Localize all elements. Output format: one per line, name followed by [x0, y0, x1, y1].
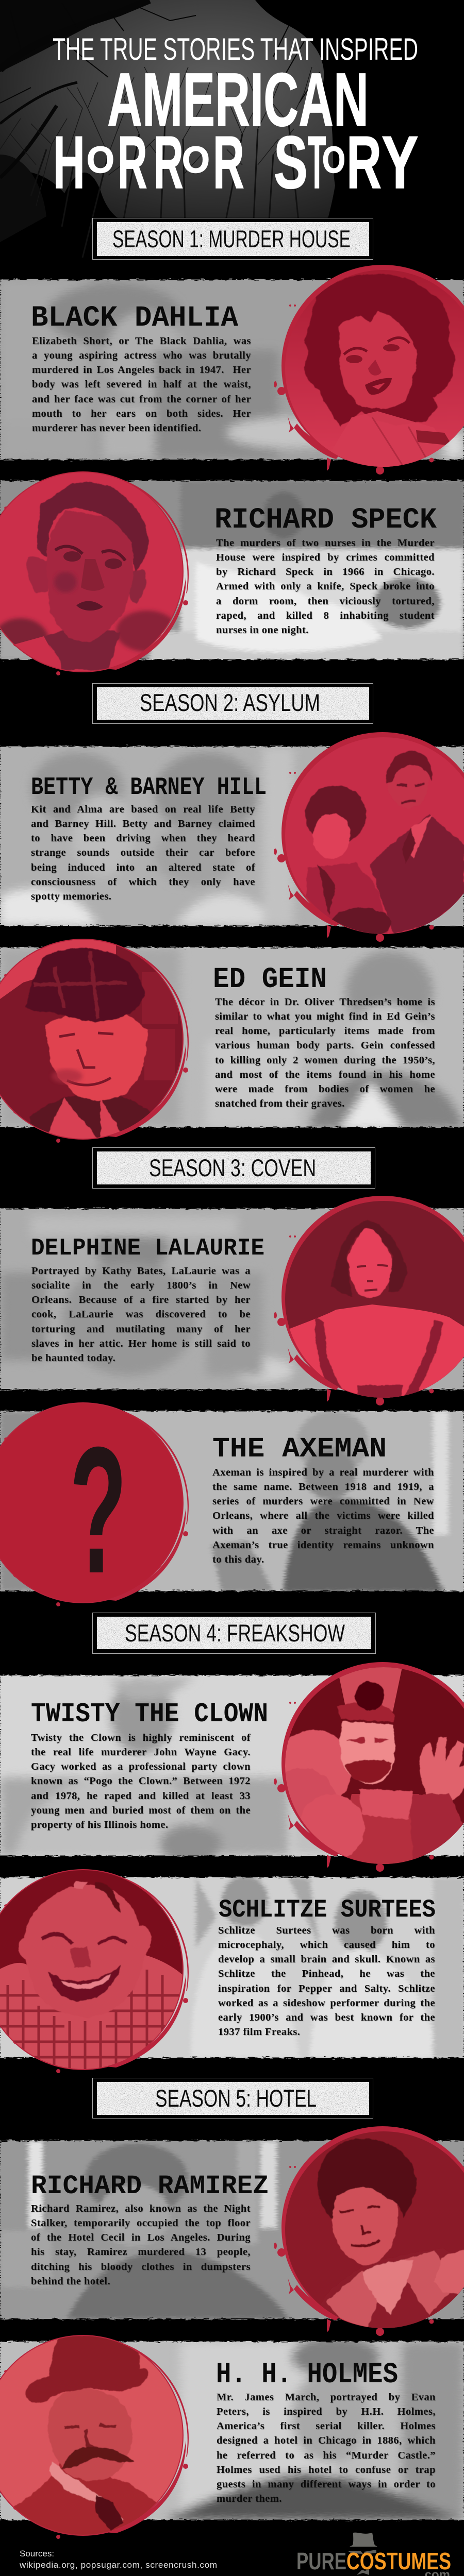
body text: being induced into an altered state of	[31, 862, 255, 873]
heading: RICHARD SPECK	[214, 504, 437, 537]
panel: Richard Ramirez	[0, 2141, 464, 2319]
body text: Axeman’s true identity remains unknown	[212, 1539, 434, 1551]
body text	[216, 537, 435, 636]
body text: snatched from their graves.	[215, 1098, 345, 1109]
title: American Horror Story: R	[118, 121, 147, 204]
panel: Delphine LaLaurie	[0, 1196, 464, 1405]
panel: H. H. Holmes	[0, 2342, 464, 2520]
body text: his stay, Ramirez murdered 13 people,	[31, 2246, 251, 2258]
heading: ED GEIN	[213, 963, 327, 996]
title: American Horror Story: O	[322, 140, 345, 181]
panel: The Axeman	[0, 1402, 464, 1611]
body text: slaves in her attic. Her home is still said to	[31, 1338, 251, 1349]
title: American Horror Story: R	[213, 121, 244, 204]
heading: DELPHINE LALAURIE	[31, 1235, 264, 1262]
body text: young men and buried most of them on the	[31, 1805, 251, 1816]
title: American Horror Story: T	[308, 121, 326, 204]
body text: 1937 film Freaks.	[218, 2026, 300, 2038]
body text: he referred to as his “Murder Castle.”	[217, 2450, 436, 2461]
body text: cook, LaLaurie was discovered to be	[31, 1309, 251, 1320]
portrait: Black Dahlia	[274, 263, 464, 474]
portrait: Richard Ramirez	[274, 2124, 464, 2336]
portrait: Richard Speck	[0, 469, 189, 675]
season banner 2: SEASON 2: ASYLUM	[140, 689, 320, 716]
heading: THE AXEMAN	[212, 1433, 387, 1465]
header: forest background and title	[0, 0, 335, 258]
body text: Armed with only a knife, Speck broke into	[216, 581, 435, 592]
body text: behind the hotel.	[31, 2276, 110, 2287]
logo: PureCostumes.com	[289, 2524, 464, 2576]
season banner 3	[92, 1147, 375, 1189]
body text: to have been driving when they heard	[31, 833, 255, 844]
body text: inspiration for Pepper and Salty. Schlitze	[218, 1983, 435, 1994]
body text: real home, particularly items made from	[215, 1025, 435, 1037]
sources: Sources:	[20, 2549, 54, 2558]
body text: designed a hotel in Chicago in 1886, which	[217, 2435, 436, 2446]
wordmark: PURE	[296, 2548, 346, 2574]
body text: ditching his bloody clothes in dumpsters	[31, 2261, 251, 2273]
body text: were made from bodies of women he	[215, 1083, 435, 1095]
body text	[215, 996, 435, 1110]
season banner 1	[92, 218, 373, 260]
body text: of the Hotel Cecil in Los Angeles. During	[31, 2232, 251, 2243]
body text: Kit and Alma are based on real life Betty	[31, 804, 255, 815]
heading: TWISTY THE CLOWN	[31, 1699, 268, 1730]
season banner 1: SEASON 1: MURDER HOUSE	[112, 225, 351, 252]
season banner 2	[92, 683, 373, 724]
body text: a dorm room, then viciously tortured,	[216, 596, 435, 607]
body text: Orleans, where all the victims were killed	[212, 1510, 434, 1521]
body text: the real life murderer John Wayne Gacy.	[31, 1747, 251, 1758]
body text: mouth to her ears on both sides. Her	[32, 408, 251, 419]
body text: nurses in one night.	[216, 624, 309, 636]
body text: The décor in Dr. Oliver Thredsen’s home is	[215, 996, 435, 1008]
body text: torturing and mutilating many of her	[31, 1324, 251, 1335]
body text: socialite in the early 1800’s in New	[31, 1280, 251, 1291]
panel: Betty and Barney Hill	[0, 732, 464, 942]
body text: The murders of two nurses in the Murder	[216, 537, 435, 549]
portrait: H. H. Holmes	[0, 2332, 189, 2539]
body text	[31, 1731, 251, 1832]
body text: murder them.	[217, 2493, 282, 2504]
body text: microcephaly, which caused him to	[218, 1939, 435, 1951]
body text: and Barney Hill. Betty and Barney claimed	[31, 818, 255, 829]
body text: consciousness of which they only have	[31, 876, 255, 888]
title: American Horror Story: AMERICAN	[107, 58, 369, 142]
panel: Twisty the Clown	[0, 1675, 464, 1856]
body text: guests in many different ways in order to	[217, 2479, 436, 2490]
body text	[31, 804, 256, 903]
body text: and most of the items found in his home	[215, 1069, 435, 1080]
season banner 5	[0, 2078, 464, 2119]
body text: Holmes used his hotel to confuse or trap	[217, 2464, 436, 2476]
body text: a young aspiring actress who was brutally	[32, 350, 251, 361]
title: American Horror Story: R	[154, 121, 184, 204]
body text: murdered in Los Angeles back in 1947. Her	[32, 364, 251, 376]
title: American Horror Story: S	[274, 121, 308, 204]
body text: to killing only 2 women during the 1950’s,	[215, 1055, 435, 1066]
panel: Ed Gein	[0, 939, 464, 1143]
body text	[31, 2201, 251, 2289]
body text: Elizabeth Short, or The Black Dahlia, was	[32, 335, 251, 347]
portrait: Ed Gein	[0, 936, 189, 1143]
heading: BLACK DAHLIA	[31, 302, 239, 335]
body text: the same name. Between 1918 and 1919, a	[212, 1481, 434, 1493]
heading: SCHLITZE SURTEES	[219, 1895, 436, 1924]
body text: Mr. James March, portrayed by Evan	[217, 2392, 436, 2403]
body text: develop a small brain and skull. Known as	[218, 1954, 435, 1965]
panel: Schlitze Surtees	[0, 1877, 464, 2058]
portrait: Schlitze Surtees	[0, 1867, 189, 2073]
body text: early 1900’s and was best known for the	[218, 2012, 435, 2023]
season banner 3: SEASON 3: COVEN	[149, 1154, 316, 1181]
body text: spotty memories.	[31, 891, 111, 902]
wordmark	[296, 2548, 451, 2574]
portrait: The Axeman (unknown): ?	[70, 1410, 127, 1611]
body text: to this day.	[212, 1554, 264, 1565]
body text: known as “Pogo the Clown.” Between 1972	[31, 1775, 251, 1787]
heading: H. H. HOLMES	[216, 2359, 398, 2392]
heading: RICHARD RAMIREZ	[31, 2171, 269, 2201]
portrait: Twisty the Clown (John Wayne Gacy)	[267, 1660, 464, 1872]
portrait: Delphine LaLaurie	[274, 1194, 464, 1405]
body text: property of his Illinois home.	[31, 1819, 169, 1831]
panel: Black Dahlia	[0, 265, 464, 474]
body text: body was left severed in half at the waist,	[32, 379, 251, 390]
body text: raped, and killed 8 inhabiting student	[216, 610, 435, 621]
body text: Portrayed by Kathy Bates, LaLaurie was a	[31, 1265, 251, 1277]
body text: Richard Ramirez, also known as the Night	[31, 2203, 251, 2214]
body text: various human body parts. Gein confessed	[215, 1040, 435, 1051]
body text: America’s first serial killer. Holmes	[217, 2420, 436, 2432]
body text: with an axe or straight razor. The	[212, 1525, 434, 1536]
body text: series of murders were committed in New	[212, 1496, 434, 1507]
body text	[212, 1465, 434, 1567]
body text: murderer has never been identified.	[32, 422, 201, 434]
body text	[218, 1923, 435, 2039]
portrait: Betty and Barney Hill	[274, 730, 464, 942]
sources: wikipedia.org, popsugar.com, screencrush.com	[19, 2560, 217, 2570]
body text	[31, 1264, 251, 1365]
body text: and 1978, he raped and killed at least 33	[31, 1790, 251, 1802]
title: American Horror Story: H	[53, 121, 85, 204]
body text: Schlitze the Pinhead, he was the	[218, 1968, 435, 1979]
body text: worked as a sideshow performer during the	[218, 1997, 435, 2009]
body text	[217, 2390, 436, 2506]
body text: strange sounds outside their car before	[31, 847, 255, 858]
title: American Horror Story: R	[346, 121, 382, 204]
body text: Schlitze Surtees was born with	[218, 1925, 435, 1936]
body text: Stalker, temporarily occupied the top floor	[31, 2217, 251, 2229]
title: American Horror Story: O	[182, 140, 210, 181]
body text: be haunted today.	[31, 1352, 115, 1364]
sources	[0, 2545, 232, 2573]
title: American Horror Story	[53, 58, 419, 204]
body text: Orleans. Because of a fire started by her	[31, 1294, 251, 1306]
body text: by Richard Speck in 1966 in Chicago.	[216, 566, 435, 578]
title: American Horror Story: Y	[382, 121, 419, 204]
body text: House were inspired by crimes committed	[216, 552, 435, 563]
heading: BETTY & BARNEY HILL	[31, 774, 267, 802]
icon: hat	[350, 2533, 377, 2547]
body text: similar to what you might find in Ed Gein’s	[215, 1011, 435, 1022]
body text: and her face was cut from the corner of her	[32, 394, 251, 405]
body text	[32, 335, 252, 434]
portrait: The Axeman (unknown)	[0, 1402, 189, 1611]
body text: Gacy worked as a professional party clown	[31, 1761, 251, 1772]
season banner 4: SEASON 4: FREAKSHOW	[125, 1619, 345, 1647]
season banner 4	[0, 1613, 464, 1654]
body text: Axeman is inspired by a real murderer with	[212, 1467, 434, 1478]
season banner 5: SEASON 5: HOTEL	[155, 2084, 317, 2112]
panel: Richard Speck	[0, 471, 464, 675]
body text: Twisty the Clown is highly reminiscent of	[31, 1732, 251, 1743]
body text: Peters, is inspired by H.H. Holmes,	[217, 2406, 436, 2417]
icon: eyebrows and moustache	[347, 2550, 376, 2575]
title: American Horror Story: O	[87, 140, 114, 181]
